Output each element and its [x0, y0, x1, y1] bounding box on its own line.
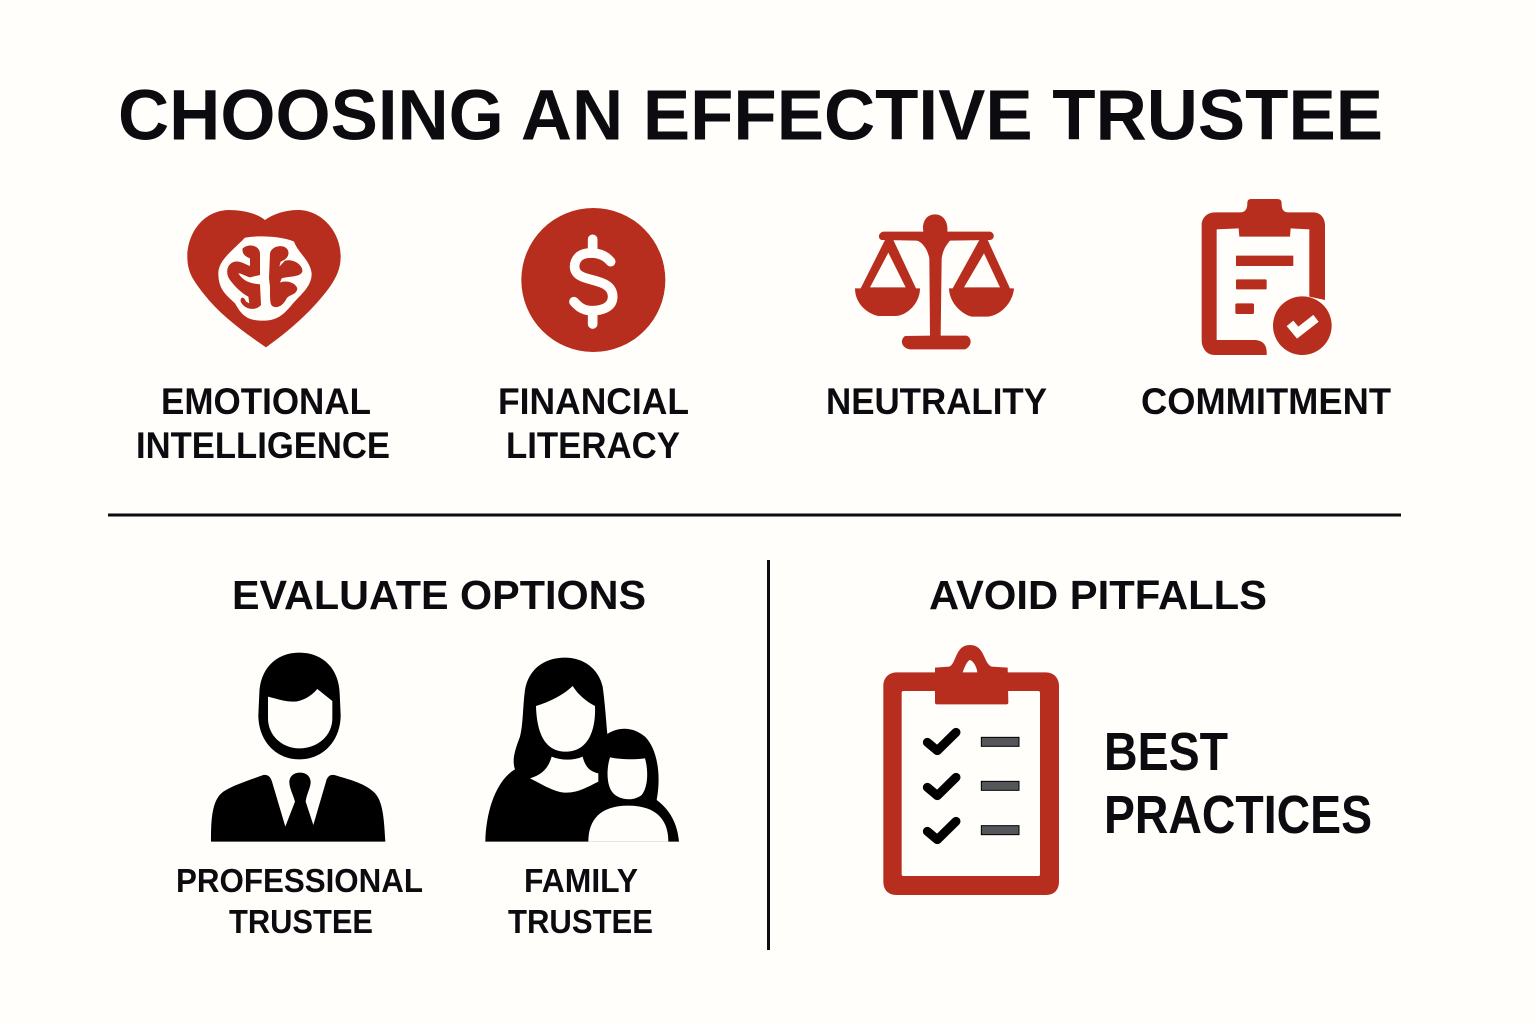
label: emotional intelligence: INTELLIGENCE	[136, 425, 390, 466]
label: emotional intelligence: EMOTIONAL	[161, 381, 371, 422]
label: best practices	[1104, 722, 1372, 845]
label: financial literacy	[498, 381, 689, 466]
label: professional trustee: PROFESSIONAL	[176, 862, 423, 899]
panel: qualities	[136, 199, 1391, 466]
icon: professional person	[211, 653, 385, 842]
label: commitment: COMMITMENT	[1141, 381, 1391, 422]
heading: evaluate options: EVALUATE OPTIONS	[232, 572, 646, 618]
label: financial literacy: LITERACY	[506, 425, 680, 466]
label: best practices: PRACTICES	[1104, 785, 1372, 845]
panel: evaluate options	[176, 572, 679, 940]
icon: parent and child	[485, 658, 679, 842]
option: family trustee	[485, 658, 679, 940]
label: best practices: BEST	[1104, 722, 1228, 782]
icon: balance scales	[855, 214, 1014, 349]
label: family trustee: FAMILY	[524, 862, 638, 899]
heading: avoid pitfalls: AVOID PITFALLS	[929, 572, 1267, 618]
quality: financial literacy	[498, 208, 689, 466]
label: neutrality: NEUTRALITY	[826, 381, 1047, 422]
icon: heart with brain	[187, 210, 341, 347]
option: professional trustee	[176, 653, 423, 940]
label: professional trustee	[176, 862, 423, 940]
icon: clipboard with check	[1202, 199, 1332, 355]
label: family trustee	[508, 862, 653, 940]
icon: dollar coin	[521, 208, 665, 352]
quality: emotional intelligence	[136, 210, 390, 466]
icon: checklist clipboard	[883, 645, 1059, 895]
panel: avoid pitfalls	[883, 572, 1372, 895]
quality: commitment	[1141, 199, 1391, 422]
label: emotional intelligence	[136, 381, 390, 466]
title: CHOOSING AN EFFECTIVE TRUSTEE	[118, 76, 1383, 156]
label: financial literacy: FINANCIAL	[498, 381, 689, 422]
quality: neutrality	[826, 214, 1047, 422]
label: family trustee: TRUSTEE	[508, 903, 653, 940]
label: professional trustee: TRUSTEE	[229, 903, 373, 940]
